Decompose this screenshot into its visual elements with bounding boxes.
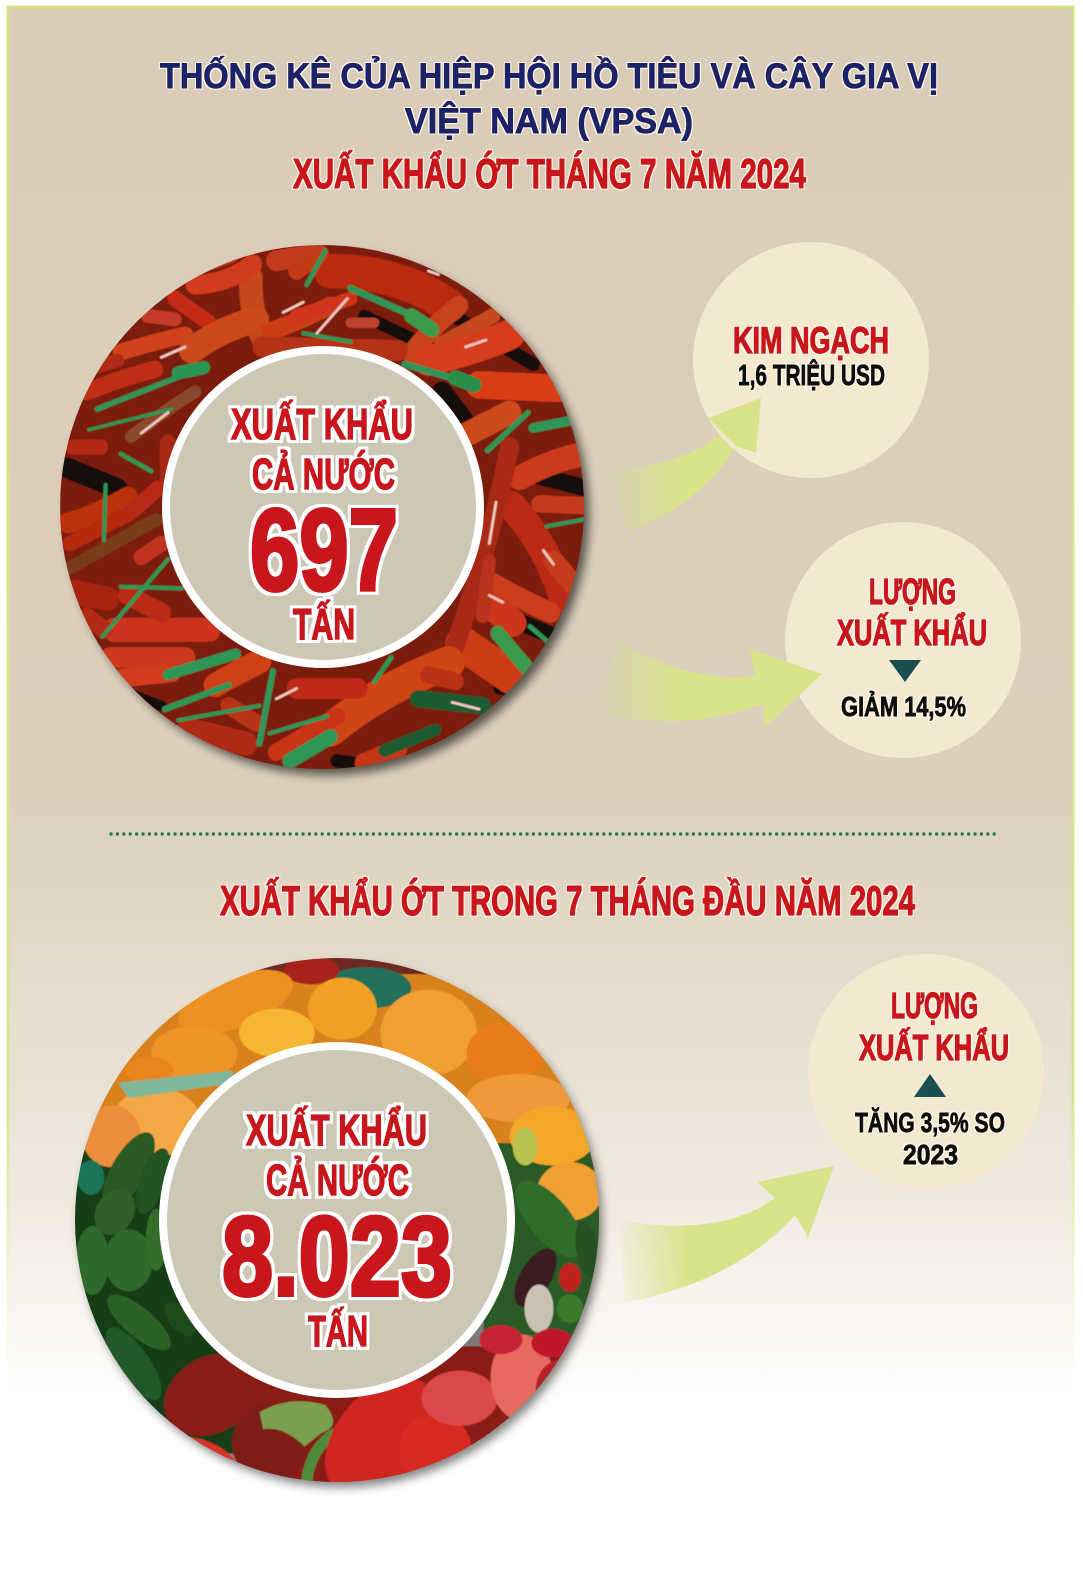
shadow [67, 253, 589, 775]
value: 1.6 million USD: 1,6 TRIỆU USD [738, 358, 885, 392]
arrow: to seven-month volume [621, 1166, 834, 1303]
icon: down triangle [889, 660, 921, 682]
icon: up triangle [914, 1074, 946, 1097]
title block [160, 56, 938, 197]
label: XUẤT KHẨU [231, 398, 413, 449]
value: down 14.5 percent: GIẢM 14,5% [841, 690, 966, 722]
circle: seven-month volume increase [808, 954, 1044, 1190]
redraw arrowhead 1 over the circle [708, 398, 761, 453]
circle: export value [693, 242, 929, 478]
big number: 8.023 [222, 1194, 452, 1319]
divider [111, 832, 995, 836]
label: xuat khau: XUẤT KHẨU [837, 611, 987, 653]
shadow [80, 965, 602, 1487]
label: luong: LƯỢNG [891, 985, 978, 1026]
value: year 2023: 2023 [903, 1139, 958, 1170]
arrow: to export value [606, 398, 761, 533]
unit: TẤN [308, 1306, 368, 1356]
label: CẢ NƯỚC [266, 1155, 409, 1205]
label: XUẤT KHẨU [246, 1104, 427, 1155]
title line 2: VIỆT NAM (VPSA) [405, 101, 693, 141]
title line 1: THỐNG KÊ CỦA HIỆP HỘI HỒ TIÊU VÀ CÂY GIA VỊ [160, 56, 938, 96]
label: luong: LƯỢNG [869, 571, 956, 612]
label: CẢ NƯỚC [252, 449, 395, 499]
circle: export volume decrease [785, 522, 1021, 758]
arrow: to export volume [595, 640, 822, 727]
photo: mixed peppers [75, 958, 599, 1482]
redraw arrowhead 2 over the circle [750, 649, 822, 727]
value: up 3.5 percent: TĂNG 3,5% SO [855, 1107, 1005, 1138]
inner badge [162, 346, 484, 668]
heading: July export: XUẤT KHẨU ỚT THÁNG 7 NĂM 2024 [293, 149, 806, 197]
redraw arrowhead 3 over the circle [758, 1166, 834, 1237]
inner badge [159, 1042, 515, 1398]
pepper photo circle [70, 950, 611, 1517]
big number: 697 [250, 485, 398, 615]
chilli photo circle [60, 240, 591, 782]
label: xuat khau: XUẤT KHẨU [859, 1026, 1009, 1068]
photo: red chillies [60, 240, 591, 782]
unit: TẤN [293, 599, 355, 649]
label: kim ngach: KIM NGẠCH [733, 320, 889, 361]
